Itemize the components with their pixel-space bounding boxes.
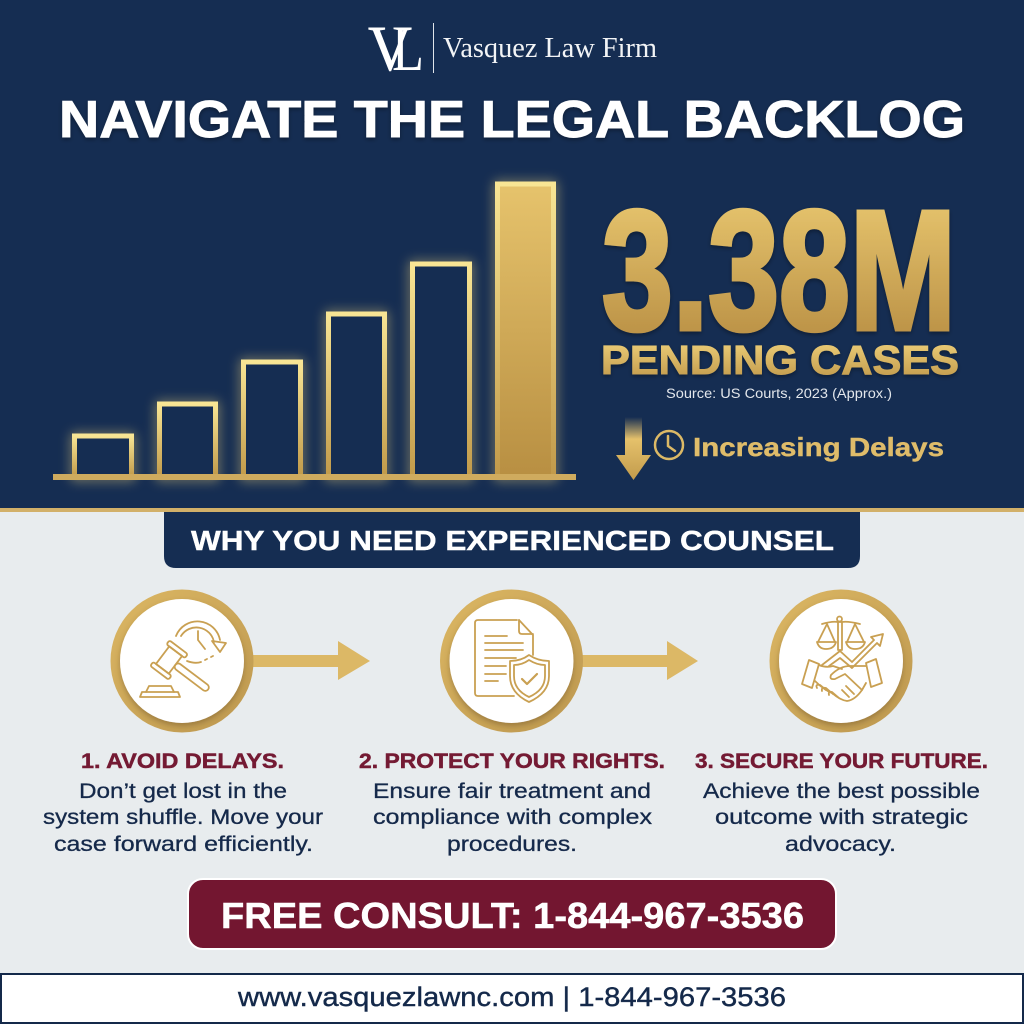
step 2 text: procedures. (447, 833, 577, 856)
step 3 icon: scales and handshake (770, 590, 912, 732)
footer bar: www.vasquezlawnc.com | 1-844-967-3536 (237, 982, 786, 1012)
step 1 text: case forward efficiently. (54, 833, 313, 856)
section heading banner: WHY YOU NEED EXPERIENCED COUNSEL (191, 525, 834, 556)
logo divider (433, 23, 434, 73)
title: NAVIGATE THE LEGAL BACKLOG (59, 91, 965, 149)
bar glows (75, 185, 553, 477)
icon: down arrow (616, 417, 651, 480)
step 2 text: 2. PROTECT YOUR RIGHTS. (359, 750, 665, 773)
statistic label: PENDING CASES (601, 337, 959, 383)
call to action button (188, 879, 836, 949)
icon: clock (655, 431, 683, 459)
step 2 text: Ensure fair treatment and (373, 780, 651, 803)
chart baseline (53, 474, 576, 480)
step 1 text: Don’t get lost in the (79, 780, 287, 803)
logo monogram VL: L (392, 13, 424, 85)
logo: Vasquez Law Firm (368, 13, 657, 85)
gold divider line (0, 508, 1024, 512)
bar 3 (244, 362, 300, 477)
step 1 text (43, 750, 323, 856)
bar 2 (160, 404, 216, 477)
bar 1 (74, 436, 132, 477)
step 3 text: Achieve the best possible (703, 780, 980, 803)
section heading banner (164, 512, 860, 568)
logo monogram VL: V (368, 13, 412, 85)
panel: navy header background (0, 0, 1024, 509)
step 2 text (359, 750, 665, 856)
bar chart: rising case backlog (53, 184, 576, 480)
increasing delays label: Increasing Delays (693, 432, 944, 462)
arrow: step 1 to step 2 (250, 641, 370, 680)
arrow: step 2 to step 3 (580, 641, 698, 680)
step 3 text: advocacy. (785, 833, 896, 856)
step 3 text (695, 750, 988, 856)
logo wordmark: Vasquez Law Firm (443, 33, 657, 64)
step 2 text: compliance with complex (373, 806, 653, 829)
step 3 text: 3. SECURE YOUR FUTURE. (695, 750, 988, 773)
bar 5 (412, 264, 470, 477)
step 1 icon: gavel and clock (110, 590, 254, 732)
source note: Source: US Courts, 2023 (Approx.) (666, 386, 892, 401)
call to action button: FREE CONSULT: 1-844-967-3536 (221, 895, 804, 936)
step 1 text: 1. AVOID DELAYS. (81, 750, 284, 773)
bar 4 (328, 314, 384, 477)
step 1 text: system shuffle. Move your (43, 806, 323, 829)
footer bar (0, 973, 1024, 1024)
bar 6 highlighted (498, 184, 554, 477)
panel: light lower background (0, 512, 1024, 1024)
step 3 text: outcome with strategic (715, 806, 968, 829)
step 2 icon: document and shield (440, 590, 583, 732)
